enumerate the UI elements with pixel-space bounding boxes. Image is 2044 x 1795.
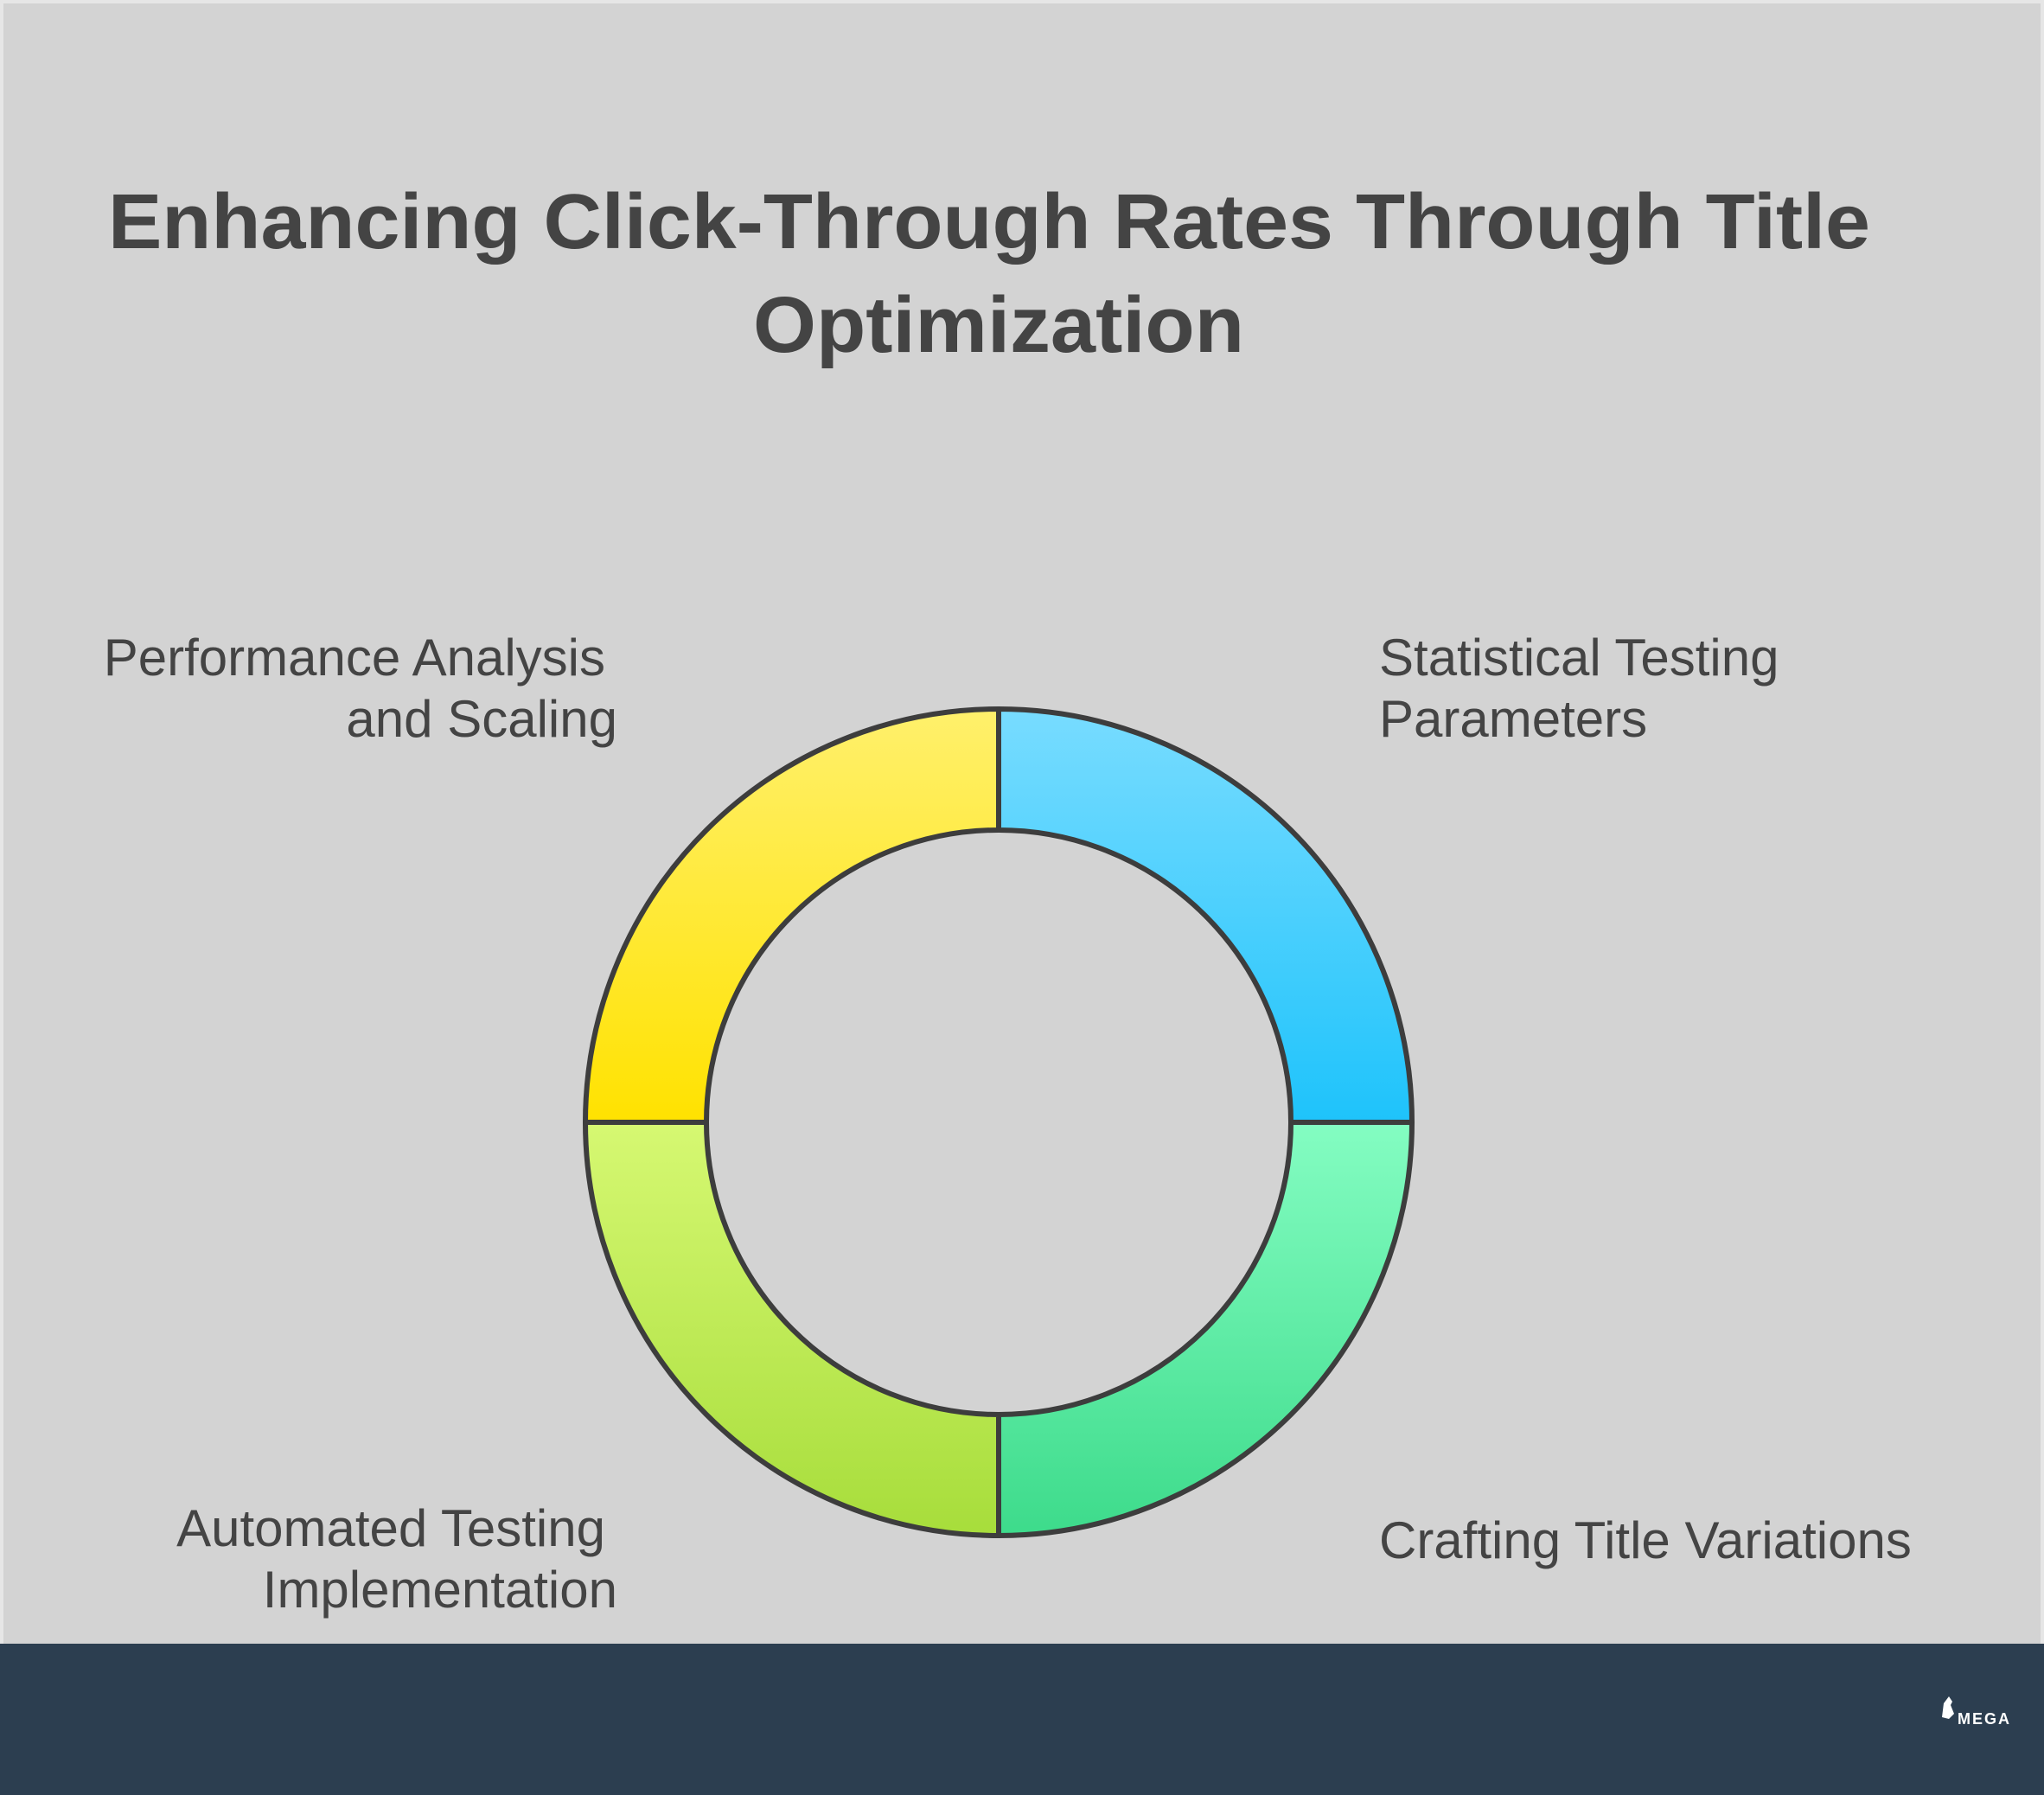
title: Optimization xyxy=(753,281,1244,369)
segment: crafting title variations xyxy=(999,1122,1412,1536)
label: crafting title variations: Crafting Title Variations xyxy=(1379,1511,1912,1569)
segment: statistical testing xyxy=(999,709,1412,1122)
footer bar xyxy=(0,1644,2044,1795)
label: statistical testing xyxy=(1379,629,1779,748)
logo: MEGA: MEGA xyxy=(1958,1710,2011,1728)
label: automated testing: Implementation xyxy=(263,1561,617,1619)
label: statistical testing: Statistical Testing xyxy=(1379,629,1779,687)
title: Enhancing Click-Through Rates Through Title xyxy=(108,179,1870,265)
label: performance analysis: Performance Analysis xyxy=(104,629,605,687)
label: performance analysis: and Scaling xyxy=(346,690,617,748)
label: statistical testing: Parameters xyxy=(1379,690,1647,748)
logo: MEGA xyxy=(1942,1696,2011,1728)
ring chart xyxy=(585,709,1412,1536)
title xyxy=(108,179,1870,369)
label: automated testing xyxy=(176,1499,617,1619)
segment: automated testing xyxy=(585,1122,999,1536)
label: automated testing: Automated Testing xyxy=(176,1499,605,1557)
segment: performance analysis xyxy=(585,709,999,1122)
label: performance analysis xyxy=(104,629,617,748)
